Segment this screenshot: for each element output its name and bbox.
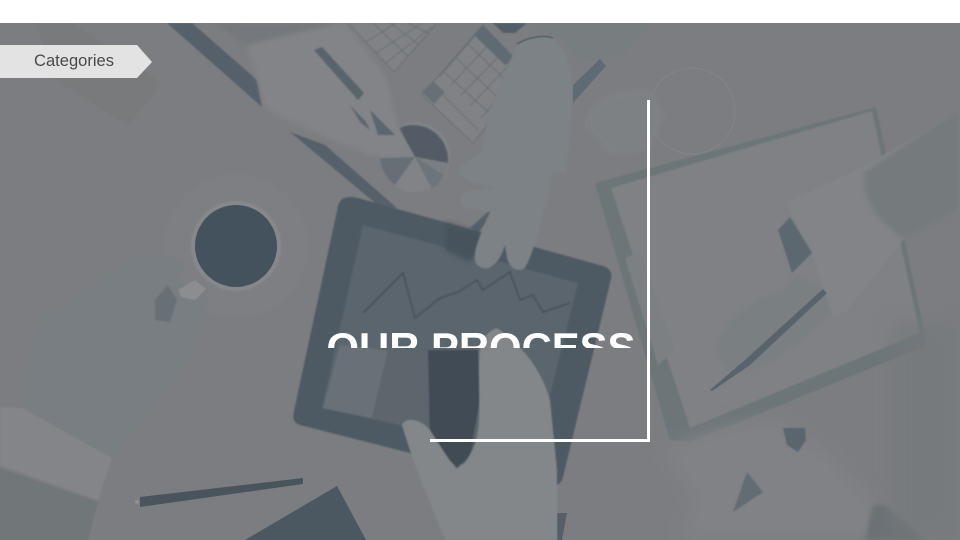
top-left hand with pen	[256, 47, 394, 136]
categories tag: Categories	[34, 52, 114, 70]
pie chart on sheet	[380, 124, 448, 188]
dark stripe by wrist	[573, 59, 606, 103]
dark table stripes	[167, 23, 497, 232]
categories tag	[0, 45, 152, 78]
glass	[649, 68, 735, 154]
dark notebook	[245, 486, 366, 540]
right side soft shading	[890, 320, 960, 540]
pen on desk	[135, 478, 303, 507]
L-shaped white frame	[430, 100, 650, 442]
small dark corner at tablet bottom	[557, 513, 567, 540]
bottom right hand and cuff	[682, 424, 918, 540]
phone	[35, 23, 158, 126]
tablet	[293, 197, 611, 485]
left hand holding mug	[0, 254, 207, 540]
printed sheets with grids	[348, 23, 527, 143]
bottom centre hand on tablet	[402, 328, 557, 540]
forearm near glass	[585, 90, 665, 155]
top centre hand	[474, 23, 554, 270]
coffee saucer and mug	[192, 202, 280, 290]
clipboard	[595, 107, 927, 442]
right hand writing with pen	[710, 154, 904, 391]
